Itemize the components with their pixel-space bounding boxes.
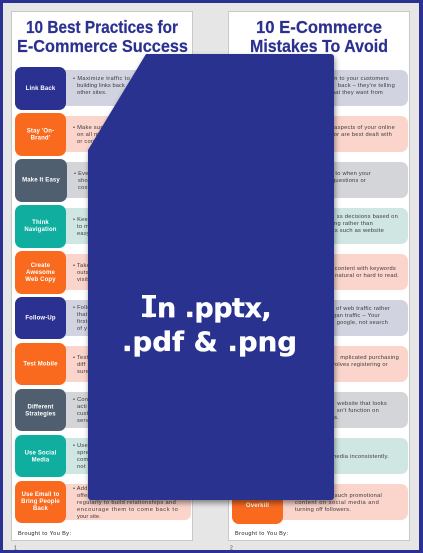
panel: mistakes page [228,12,410,540]
row 7: test mobile [15,343,191,385]
row 6: follow-up: first- [77,319,90,325]
row 2: stay on-brand: • Make sure your brand [73,125,137,131]
row 2: stay on-brand [15,113,191,156]
row 10: use email: regularly to build relationships and [77,500,176,506]
row 10: use email: encourage them to come back to [77,507,178,513]
heading: mistakes: 10 E-Commerce [256,17,382,37]
row 10: use email: Back [33,506,48,512]
row 9: use social media: spre [77,450,89,456]
heading: mistakes [250,17,388,56]
row 10: use email: offer [77,493,90,499]
row 5: create awesome web copy: visit [77,277,88,283]
mistake 4: ss decisions based on [337,214,398,220]
callout text: n .pptx, [157,293,271,324]
mistake 10: overkill [232,481,408,524]
row 3: make it easy: cost [78,185,90,191]
row 10: use email: your site. [77,514,101,520]
row 5: create awesome web copy: Web Copy [25,277,56,283]
row 9: use social media: com [77,457,89,463]
mistake 2: aspects of your online [334,125,395,131]
row 5: create awesome web copy: Create [31,263,51,269]
row 8: different strategies: Different [27,404,54,410]
row 4: think navigation: Navigation [24,227,57,233]
row 10: use email [15,481,191,523]
row 3: make it easy [15,159,191,202]
row 10: use email: • Add [73,486,88,492]
mistake 10: overkill: content on social media and [295,500,379,506]
mistake 1: back – they're telling [338,83,395,89]
row 8: different strategies: cust [77,411,89,417]
mistake 4: ng rather than [334,221,373,227]
row 1: link back: Link Back [26,86,56,92]
row 4: think navigation: • Keep [73,217,91,223]
row 1: link back: building links back [77,83,125,89]
heading: best practices: 10 Best Practices for [26,17,178,37]
mistake 10: overkill: Overkill [246,503,269,509]
row 1: link back: other sites. [77,90,107,96]
row 8: different strategies [15,389,191,431]
panel: best practices page [12,12,192,540]
mistake 8: website that looks [336,401,387,407]
row 4: think navigation: to make [77,224,99,230]
row 3: make it easy: • Every page [74,171,109,177]
mistake 6: of web traffic rather [336,306,390,312]
footer: brought to you by: Brought to You By: [18,531,71,537]
row 7: test mobile: diff [77,362,86,368]
row 4: think navigation: easy [77,231,90,237]
row 5: create awesome web copy: outs [77,270,89,276]
row 10: use email: Bring People [21,499,60,505]
mistake 6: google, not search [337,320,388,326]
mistake 7: mplicated purchasing [340,355,399,361]
mistake 4: cs such as website [332,228,384,234]
mistake 7: nvolves registering or [328,362,388,368]
row 4: think navigation: Think [32,220,49,226]
callout text: I [144,293,154,324]
mistake 2: or are best dealt with [334,132,392,138]
mistake 10: overkill: turning off followers. [295,507,351,513]
mistake 9: media inconsistently. [331,454,389,460]
mistake 3: to when your [335,171,371,177]
file-shaped callout [88,54,334,500]
row 9: use social media: not [77,464,86,470]
row 1: link back [15,67,191,110]
mistake 6 [270,300,408,336]
mistake 7 [270,346,408,382]
row 2: stay on-brand: on all marketing [77,132,121,138]
mistake 8: sn't function on [337,408,379,414]
row 6: follow-up [15,297,191,339]
page number 1: 1 [14,546,17,552]
row 6: follow-up: that [77,312,88,318]
mistake 5: natural or hard to read. [335,273,399,279]
mistake 1: that they want from [330,90,383,96]
row 3: make it easy: Make It Easy [22,178,60,184]
mistake 3: re questions or [325,178,366,184]
row 5: create awesome web copy: • Take [73,263,90,269]
row 6: follow-up: of y [77,326,87,332]
row 8: different strategies: acti [77,404,87,410]
row 2: stay on-brand: Stay 'On- [27,128,54,134]
mistake 5: content with keywords [335,266,396,272]
row 3: make it easy: should [78,178,96,184]
mistake 9 [270,438,408,474]
row 10: use email: Use Email to [22,492,60,498]
mistake 10: overkill: such promotional [335,493,382,499]
mistake 6: gan traffic – Your [333,313,380,319]
mistake 1 [270,70,408,106]
row 9: use social media: • Use [73,443,88,449]
row 7: test mobile: • Test [73,355,89,361]
mistake 2 [270,116,408,152]
heading: best practices: E-Commerce Success [17,36,188,56]
page number 2: 2 [230,546,233,552]
heading: mistakes: Mistakes To Avoid [250,36,388,56]
row 5: create awesome web copy [15,251,191,294]
row 5: create awesome web copy: Awesome [26,270,55,276]
row 2: stay on-brand: Brand' [31,136,51,142]
row 8: different strategies: • Con [73,397,88,403]
row 6: follow-up: • Follow [73,305,96,311]
footer: brought to you by: Brought to You By: [235,531,288,537]
row 8: different strategies: Strategies [25,412,56,418]
mistake 8 [270,392,408,428]
row 7: test mobile: sure [77,369,89,375]
row 1: link back: • Maximize traffic to [73,76,130,82]
mistake 8: es. [331,415,339,421]
row 9: use social media [15,435,191,477]
heading: best practices [17,17,188,56]
row 8: different strategies: serv [77,418,89,424]
row 7: test mobile: Test Mobile [23,362,58,368]
row 4: think navigation [15,205,191,248]
mistake 1: n to your customers [334,76,389,82]
row 2: stay on-brand: or content [77,139,105,145]
callout text [122,293,297,358]
row 9: use social media: Use Social [25,450,57,456]
mistake 4 [270,208,408,244]
mistake 5 [270,254,408,290]
callout text: .pdf & .png [122,327,297,358]
mistake 3 [270,162,408,198]
row 6: follow-up: Follow-Up [25,316,56,322]
row 9: use social media: Media [32,458,50,464]
